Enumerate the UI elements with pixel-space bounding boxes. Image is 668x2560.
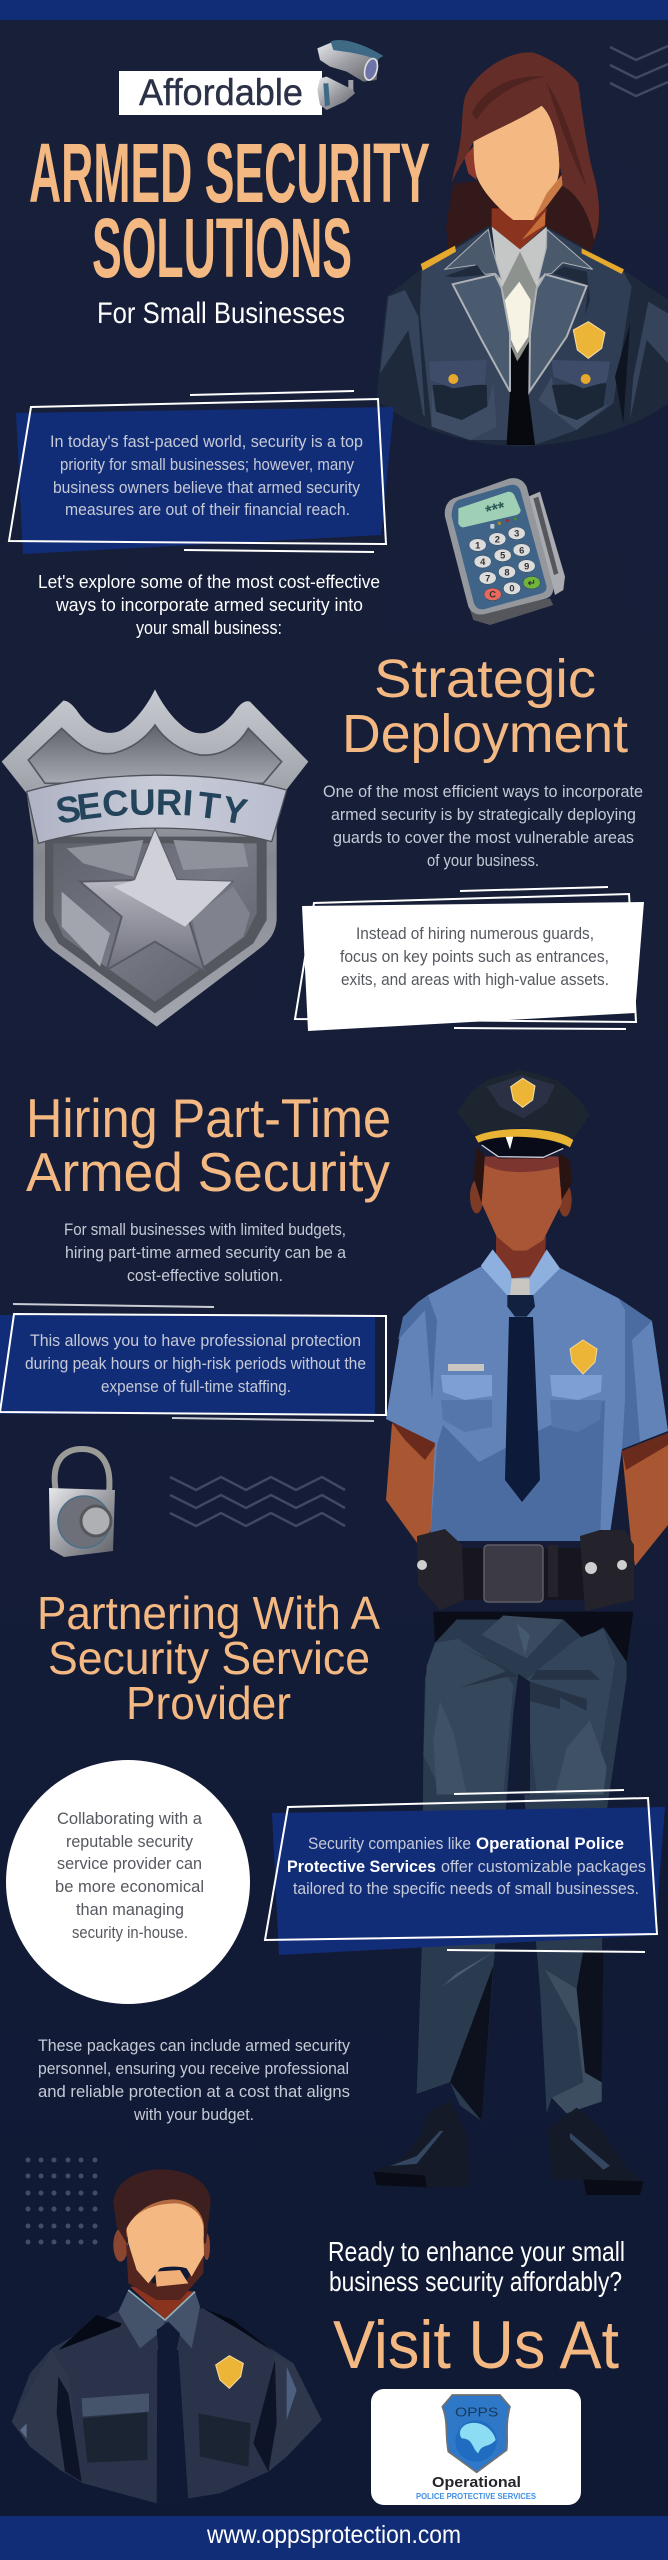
icon: keypad: C (489, 590, 496, 600)
heading: Hiring Part-Time Armed Security: Armed Security (26, 1141, 390, 1203)
text: strategic deployment body: guards to cover the most vulnerable areas (333, 828, 634, 847)
panel: collaborating circle: than managing (76, 1900, 184, 1919)
illustration: bearded security officer (12, 2169, 322, 2503)
panel: security companies: offer customizable packages (441, 1857, 646, 1876)
panel: security companies: Security companies like (308, 1834, 471, 1853)
panel: collaborating circle: reputable security (66, 1832, 193, 1851)
text: part-time body: cost-effective solution. (127, 1266, 283, 1285)
text: explore: Let's explore some of the most cost-effective (38, 572, 380, 592)
text: strategic deployment body: armed security is by strategically deploying (331, 805, 636, 824)
panel: security companies: Protective Services (287, 1857, 436, 1876)
text: explore: ways to incorporate armed security into (55, 595, 363, 615)
panel: security companies: tailored to the specific needs of small businesses. (293, 1879, 639, 1898)
decorative chevrons: top right (610, 46, 668, 96)
text: these packages: These packages can include armed security (38, 2036, 350, 2055)
text: these packages: and reliable protection at a cost that aligns (38, 2082, 350, 2101)
panel: professional protection: during peak hours or high-risk periods without the (25, 1354, 366, 1373)
icon: keypad: 4 (480, 557, 486, 567)
guard trousers and shoes (373, 1612, 643, 2195)
heading: Partnering With A Security Service Provider: Partnering With A (37, 1587, 380, 1639)
heading: Strategic Deployment: Deployment (342, 704, 628, 764)
icon: combination padlock (49, 1449, 115, 1557)
heading: Hiring Part-Time Armed Security (26, 1087, 391, 1203)
heading: Partnering With A Security Service Provider: Provider (126, 1677, 291, 1729)
tag: Affordable: Affordable (139, 72, 303, 113)
heading: Visit Us At: Visit Us At (333, 2307, 619, 2383)
footer bar: www.oppsprotection.com (206, 2521, 461, 2549)
icon: keypad: 7 (485, 573, 490, 583)
text: explore (38, 572, 380, 638)
text: these packages: with your budget. (133, 2105, 254, 2124)
logo card: Operational (432, 2474, 521, 2491)
panel: instead of hiring: Instead of hiring numerous guards, (356, 924, 594, 943)
decorative dots (26, 2158, 98, 2244)
logo card: POLICE PROTECTIVE SERVICES (416, 2492, 537, 2501)
text: part-time body: hiring part-time armed security can be a (65, 1243, 346, 1262)
heading: Hiring Part-Time Armed Security: Hiring Part-Time (26, 1087, 391, 1149)
panel: collaborating circle: security in-house. (72, 1923, 188, 1942)
heading: Strategic Deployment: Strategic (374, 649, 596, 709)
panel: collaborating circle: Collaborating with a (57, 1809, 203, 1828)
guard belt (417, 1529, 634, 1611)
panel: intro (9, 391, 394, 554)
title: SOLUTIONS (92, 201, 352, 295)
icon: keypad: 3 (514, 529, 519, 539)
text: strategic deployment body: of your business. (427, 851, 539, 870)
text: these packages (38, 2036, 350, 2124)
decorative zigzag (170, 1477, 345, 1526)
text: strategic deployment body (323, 782, 643, 870)
icon: keypad (445, 478, 565, 625)
panel: intro: priority for small businesses; however, many (60, 455, 354, 474)
top bar (0, 0, 668, 20)
icon: keypad: ↵ (528, 578, 536, 588)
icon: keypad: 5 (500, 551, 505, 561)
icon: keypad: 6 (519, 545, 524, 555)
guard head and cap (457, 1070, 590, 1317)
icon: keypad: 1 (475, 540, 480, 550)
guard arms (386, 1423, 437, 1547)
icon: keypad: 0 (509, 584, 515, 594)
panel: collaborating circle: service provider can (57, 1854, 202, 1873)
text: part-time body (64, 1220, 346, 1285)
panel: intro: measures are out of their financial reach. (65, 500, 350, 519)
icon: keypad: 9 (524, 561, 529, 571)
panel: professional protection: expense of full-time staffing. (101, 1377, 291, 1396)
heading: Partnering With A Security Service Provider (37, 1587, 380, 1729)
panel: collaborating circle: be more economical (55, 1877, 204, 1896)
panel: intro: business owners believe that armed security (53, 478, 360, 497)
panel: instead of hiring (295, 887, 644, 1031)
panel: instead of hiring: focus on key points such as entrances, (340, 947, 609, 966)
panel: professional protection (0, 1304, 386, 1421)
heading: Partnering With A Security Service Provider: Security Service (48, 1632, 370, 1684)
icon: keypad: *** (483, 498, 508, 521)
logo shield (442, 2395, 510, 2472)
text: these packages: personnel, ensuring you receive professional (38, 2059, 349, 2078)
illustration: standing security guard (373, 1070, 668, 2195)
text: ready to enhance (328, 2236, 625, 2297)
subtitle: For Small Businesses (97, 297, 345, 330)
guard shirt (386, 1267, 668, 1541)
text: part-time body: For small businesses with limited budgets, (64, 1220, 346, 1239)
icon: keypad: 2 (495, 534, 500, 544)
text: strategic deployment body: One of the most efficient ways to incorporate (323, 782, 643, 801)
text: explore: your small business: (136, 618, 282, 638)
icon: security badge: SECURITY (53, 782, 250, 833)
illustration: female security guard (377, 52, 668, 447)
panel: instead of hiring: exits, and areas with high-value assets. (341, 970, 609, 989)
icon: security camera (317, 40, 383, 110)
panel: security companies (265, 1790, 665, 1955)
logo card (371, 2389, 581, 2505)
panel: intro: In today's fast-paced world, security is a top (50, 432, 363, 451)
icon: keypad: 8 (504, 567, 510, 577)
title (29, 126, 430, 295)
heading: Strategic Deployment (342, 649, 628, 764)
panel: professional protection: This allows you to have professional protection (30, 1331, 361, 1350)
panel: collaborating circle (6, 1760, 250, 2004)
panel: security companies: Operational Police (476, 1834, 624, 1853)
logo shield: OPPS (455, 2406, 498, 2420)
icon: security badge (2, 689, 308, 1027)
footer bar (0, 2516, 668, 2560)
